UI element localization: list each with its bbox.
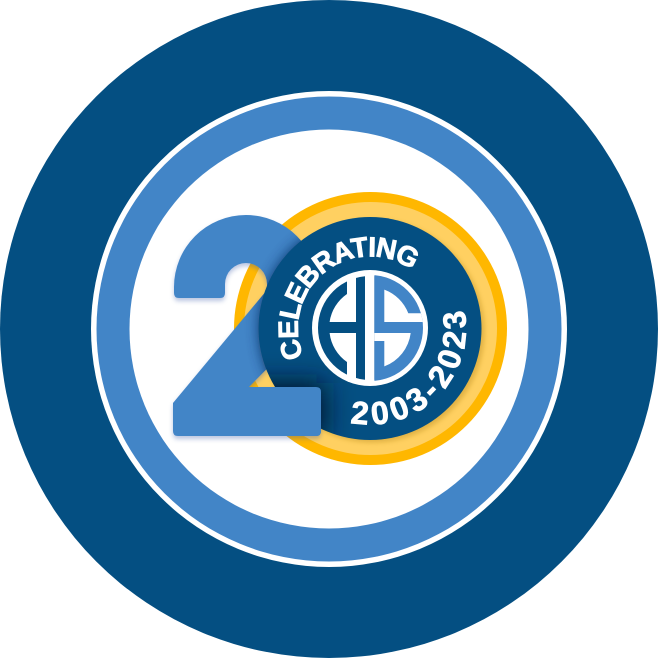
- shadow of medallion on numeral: [250, 236, 301, 375]
- HS logo: [312, 270, 434, 386]
- soft shadow of medallion on yellow: [262, 220, 484, 442]
- thin white ring: [91, 91, 567, 567]
- H upper counter: [330, 278, 356, 322]
- centre divider: [365, 270, 374, 386]
- yellow medallion: [234, 192, 507, 465]
- S lower counter: [374, 333, 411, 366]
- curved text: CELEBRATING: CELEBRATING: [278, 236, 418, 360]
- numeral 2 base bar: [240, 387, 321, 436]
- numeral 2: [173, 215, 321, 436]
- S upper counter: [384, 290, 422, 322]
- numeral 2 soft shadow: [173, 218, 321, 439]
- letter S fill: [374, 275, 423, 381]
- curved text: 2003-2023: 2003-2023: [350, 311, 466, 425]
- light blue ring: [96, 96, 562, 562]
- inner white disc: [130, 130, 528, 528]
- H lower counter: [330, 333, 356, 378]
- shadow of numeral base on disc: [225, 383, 325, 439]
- dark blue medallion disc: [258, 217, 482, 440]
